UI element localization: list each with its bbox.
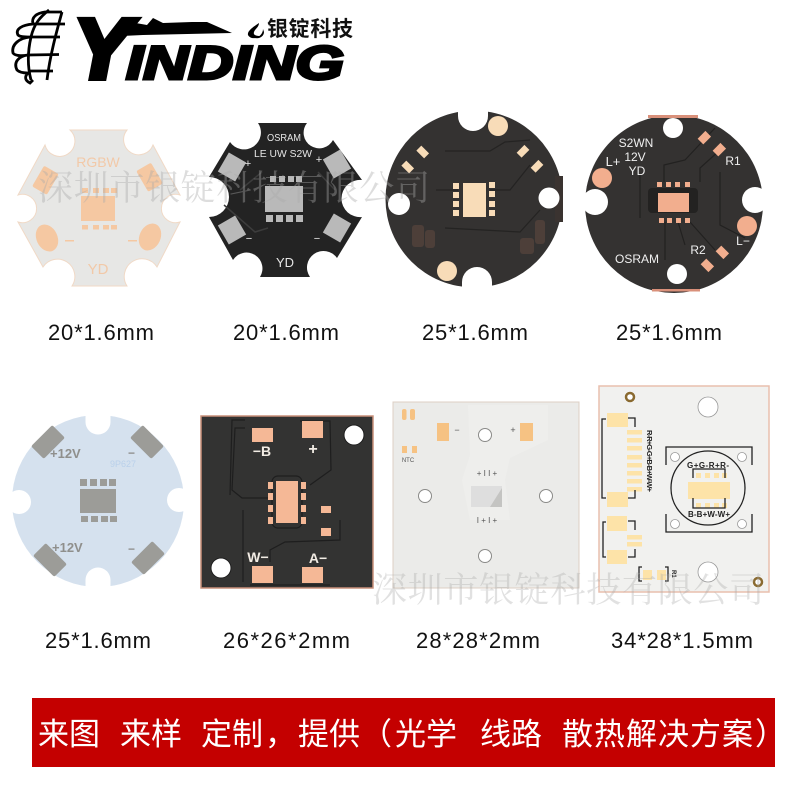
- board: 34mm white with connectors: G+G-R+R-: [687, 461, 729, 470]
- icon: flame: [248, 23, 264, 38]
- board: 26mm square dark: [201, 416, 373, 588]
- board: 20mm black star OSRAM: −: [246, 233, 252, 245]
- label: 26*26*2mm: 26*26*2mm: [223, 628, 350, 653]
- watermark: upper: 深圳市银锭科技有限公司: [38, 161, 430, 211]
- board: 25mm round dark S2WN: S2WN: [619, 136, 653, 150]
- board: 25mm round dark S2WN: R2: [690, 243, 706, 257]
- board: 25mm round dark S2WN: 12V: [624, 150, 646, 164]
- label: 20*1.6mm: 20*1.6mm: [48, 320, 154, 345]
- banner text: （: [361, 709, 392, 754]
- banner text: 线路: [480, 709, 542, 754]
- wordmark: Y: [74, 2, 137, 96]
- board: 20mm black star OSRAM: +: [245, 158, 251, 170]
- banner text: 光学: [395, 709, 457, 754]
- board: 26mm square dark: W−: [247, 549, 269, 565]
- banner text: 来样: [120, 709, 182, 754]
- board: 20mm black star OSRAM: OSRAM: [267, 132, 301, 144]
- banner text: 提供: [298, 709, 360, 754]
- banner text: 散热解决方案: [562, 709, 754, 754]
- banner text: 来图: [38, 709, 100, 754]
- board: 26mm square dark: +: [308, 441, 318, 458]
- board: 25mm round pale blue +12V: +12V: [52, 540, 83, 555]
- banner text: ，: [265, 709, 296, 754]
- board: 20mm black star OSRAM: +: [316, 154, 322, 166]
- board: 34mm white with connectors: B-B+W-W+: [688, 510, 730, 519]
- board: 34mm white with connectors: [599, 386, 769, 592]
- board: 20mm black star OSRAM: [209, 123, 362, 277]
- board: 25mm round dark S2WN: L−: [736, 234, 750, 248]
- watermark: lower: 深圳市银锭科技有限公司: [372, 563, 764, 613]
- wordmark: [74, 2, 344, 96]
- icon: globe: [13, 10, 65, 83]
- board: 25mm round dark S2WN: R1: [725, 154, 741, 168]
- board: 25mm round dark, cream pads: [386, 101, 563, 297]
- board: 28mm square white: NTC: [402, 458, 415, 464]
- board: 25mm round dark S2WN: YD: [629, 164, 646, 178]
- board: 25mm round dark S2WN: [582, 115, 768, 293]
- board: 25mm round pale blue +12V: [7, 408, 191, 594]
- banner text: 定制: [201, 709, 263, 754]
- label: 25*1.6mm: 25*1.6mm: [45, 628, 151, 653]
- label: 34*28*1.5mm: 34*28*1.5mm: [611, 628, 753, 653]
- board: 25mm round pale blue +12V: +12V: [50, 446, 81, 461]
- board: 28mm square white: I + I +: [477, 516, 498, 525]
- board: 25mm round pale blue +12V: −: [128, 542, 135, 556]
- board: 20mm white star RGBW: [18, 130, 180, 286]
- board: 26mm square dark: −B: [253, 443, 271, 459]
- board: 28mm square white: +: [510, 425, 516, 435]
- board: 28mm square white: + I I +: [477, 469, 498, 478]
- board: 34mm white with connectors: R-R+G-G+B-B+W-W+: [645, 430, 654, 493]
- board: 28mm square white: −: [454, 425, 460, 435]
- label: 28*28*2mm: 28*28*2mm: [416, 628, 540, 653]
- board: 25mm round dark S2WN: L+: [606, 154, 620, 169]
- label: 25*1.6mm: 25*1.6mm: [422, 320, 528, 345]
- label: 25*1.6mm: 25*1.6mm: [616, 320, 722, 345]
- wordmark: INDING: [126, 36, 344, 89]
- logo: YINDING: [13, 2, 353, 96]
- board: 20mm white star RGBW: YD: [88, 261, 109, 278]
- banner: [32, 698, 786, 767]
- board: 20mm white star RGBW: RGBW: [76, 154, 121, 170]
- label: 20*1.6mm: 20*1.6mm: [233, 320, 339, 345]
- board: 25mm round dark S2WN: OSRAM: [615, 252, 659, 266]
- board: 34mm white with connectors: R1: [670, 570, 676, 578]
- board: 25mm round pale blue +12V: 9P627: [110, 459, 136, 469]
- banner text: ）: [755, 709, 786, 754]
- board: 25mm round pale blue +12V: −: [128, 446, 135, 460]
- board: 20mm black star OSRAM: YD: [276, 255, 294, 270]
- company name: 银锭科技: [267, 18, 353, 41]
- board: 28mm square white: [393, 402, 579, 588]
- board: 26mm square dark: A−: [309, 550, 327, 566]
- board: 20mm black star OSRAM: LE UW S2W: [254, 148, 312, 160]
- board: 20mm black star OSRAM: −: [314, 233, 320, 245]
